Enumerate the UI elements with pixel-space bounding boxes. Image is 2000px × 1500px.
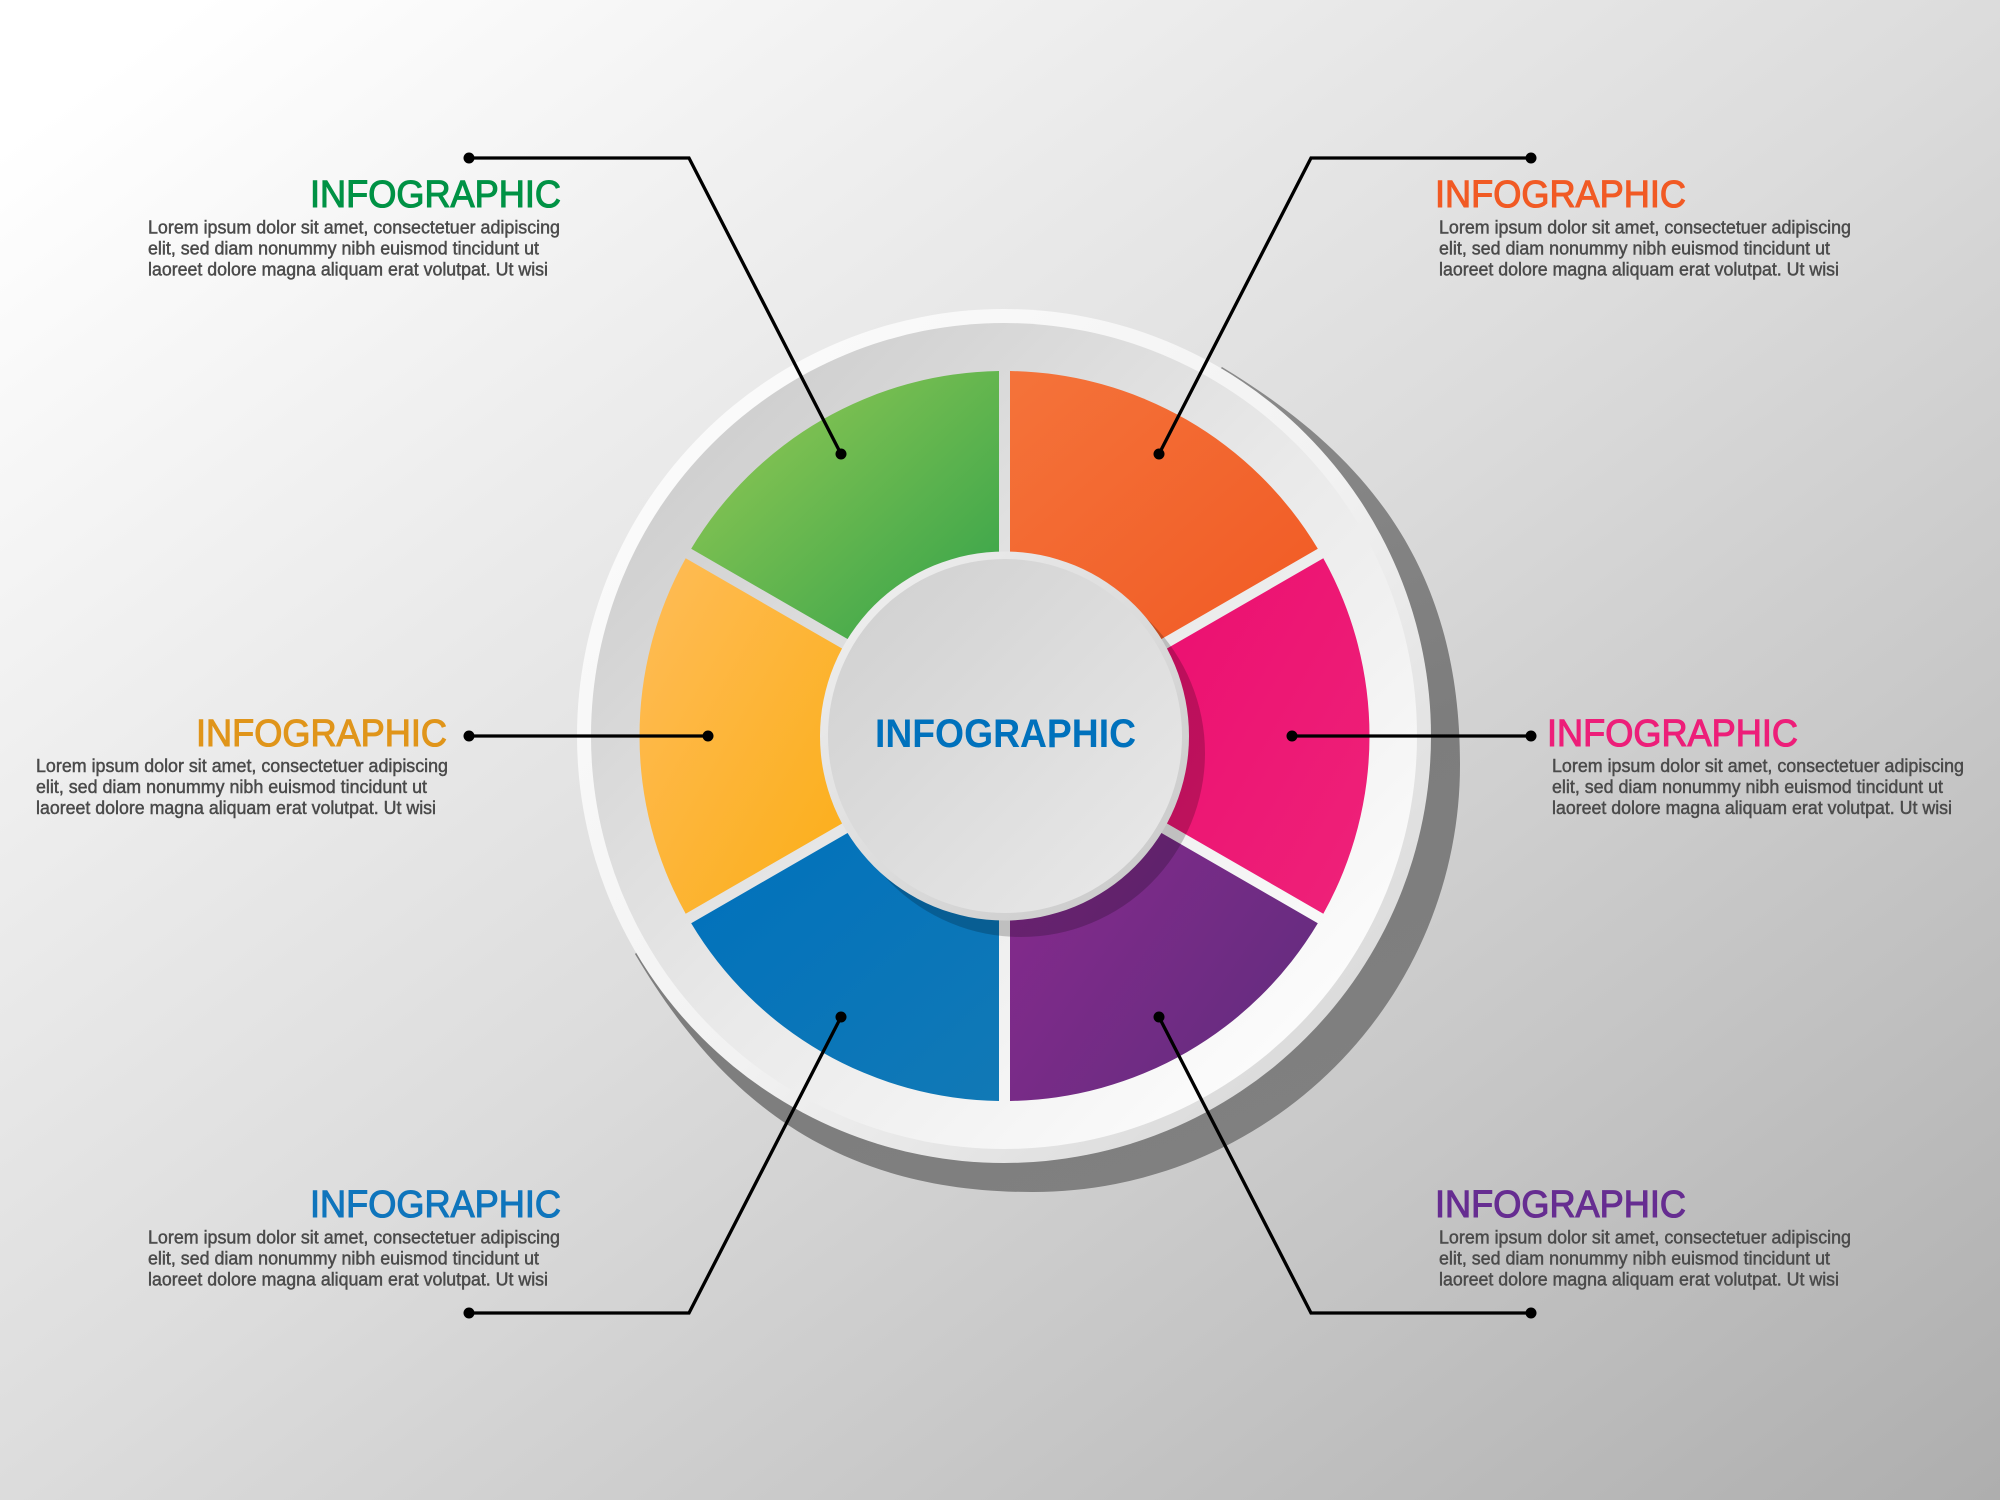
text block: green: Lorem ipsum dolor sit amet, consectetuer adipiscing bbox=[148, 218, 560, 238]
text block: pink: Lorem ipsum dolor sit amet, consectetuer adipiscing bbox=[1552, 756, 1964, 776]
text block: yellow bbox=[36, 713, 448, 818]
wheel drop shadow bbox=[635, 367, 1460, 1192]
text block: blue: laoreet dolore magna aliquam erat volutpat. Ut wisi bbox=[148, 1270, 548, 1290]
outer ring bbox=[577, 309, 1431, 1163]
segment: blue bbox=[691, 833, 999, 1101]
text block: green: INFOGRAPHIC bbox=[310, 174, 561, 216]
center disc face bbox=[828, 559, 1182, 913]
segment: yellow bbox=[640, 558, 842, 914]
text block: pink: elit, sed diam nonummy nibh euismod tincidunt ut bbox=[1552, 777, 1943, 797]
connector: orange bbox=[1154, 152, 1536, 460]
segment: pink bbox=[1167, 558, 1369, 914]
text block: green: elit, sed diam nonummy nibh euismod tincidunt ut bbox=[148, 238, 539, 258]
segment: purple bbox=[1010, 833, 1318, 1101]
text block: orange: INFOGRAPHIC bbox=[1435, 174, 1686, 216]
connector: blue bbox=[464, 1012, 846, 1318]
text block: purple bbox=[1435, 1184, 1851, 1290]
connector: green bbox=[464, 152, 846, 460]
center disc rim bbox=[820, 552, 1189, 920]
text block: pink bbox=[1547, 713, 1964, 818]
center disc shadow bbox=[837, 569, 1205, 937]
text block: green: laoreet dolore magna aliquam erat volutpat. Ut wisi bbox=[148, 260, 548, 280]
text block: orange bbox=[1435, 174, 1851, 280]
text block: yellow: INFOGRAPHIC bbox=[196, 713, 447, 755]
text block: blue bbox=[148, 1184, 561, 1290]
text block: pink: INFOGRAPHIC bbox=[1547, 713, 1798, 755]
text block: yellow: Lorem ipsum dolor sit amet, consectetuer adipiscing bbox=[36, 756, 448, 776]
connector: purple bbox=[1154, 1012, 1536, 1318]
text block: orange: laoreet dolore magna aliquam erat volutpat. Ut wisi bbox=[1439, 260, 1839, 280]
text block: purple: laoreet dolore magna aliquam erat volutpat. Ut wisi bbox=[1439, 1270, 1839, 1290]
text block: blue: Lorem ipsum dolor sit amet, consectetuer adipiscing bbox=[148, 1228, 560, 1248]
text block: purple: INFOGRAPHIC bbox=[1435, 1184, 1686, 1226]
connector: pink bbox=[1286, 730, 1536, 742]
text block: blue: elit, sed diam nonummy nibh euismod tincidunt ut bbox=[148, 1248, 539, 1268]
text block: green bbox=[148, 174, 561, 280]
text block: yellow: elit, sed diam nonummy nibh euismod tincidunt ut bbox=[36, 777, 427, 797]
text block: purple: elit, sed diam nonummy nibh euismod tincidunt ut bbox=[1439, 1248, 1830, 1268]
center title: INFOGRAPHIC bbox=[875, 712, 1136, 756]
text block: pink: laoreet dolore magna aliquam erat volutpat. Ut wisi bbox=[1552, 798, 1952, 818]
text block: orange: Lorem ipsum dolor sit amet, consectetuer adipiscing bbox=[1439, 218, 1851, 238]
segment: green bbox=[691, 371, 999, 639]
segment: orange bbox=[1010, 371, 1318, 639]
text block: yellow: laoreet dolore magna aliquam erat volutpat. Ut wisi bbox=[36, 798, 436, 818]
text block: orange: elit, sed diam nonummy nibh euismod tincidunt ut bbox=[1439, 238, 1830, 258]
ring face bbox=[591, 323, 1417, 1149]
connector: yellow bbox=[464, 730, 714, 742]
wheel bbox=[577, 309, 1460, 1192]
text block: purple: Lorem ipsum dolor sit amet, consectetuer adipiscing bbox=[1439, 1228, 1851, 1248]
text block: blue: INFOGRAPHIC bbox=[310, 1184, 561, 1226]
